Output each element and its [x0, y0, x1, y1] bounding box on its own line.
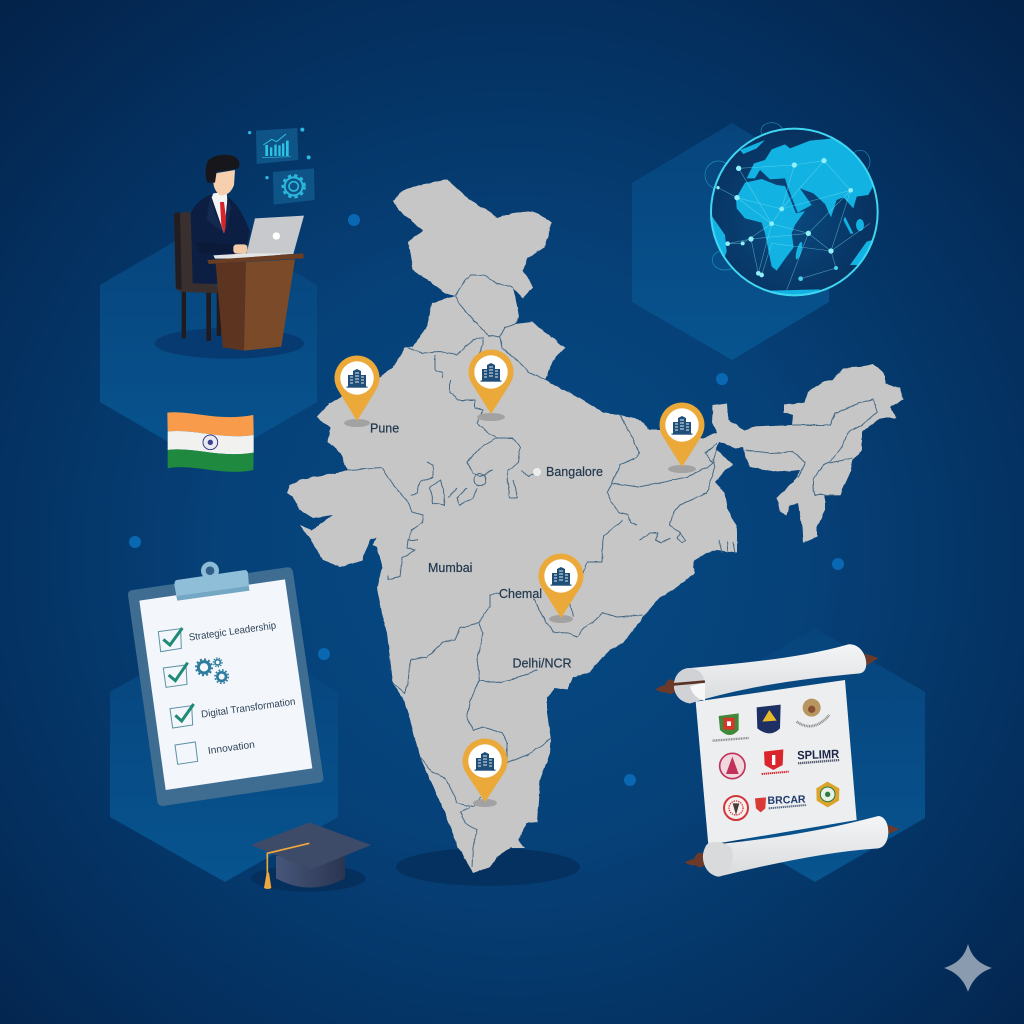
- state borders: [348, 275, 877, 867]
- hexagon: top left: [100, 222, 317, 465]
- hexagon: top right: [632, 123, 831, 360]
- indian flag: [167, 412, 254, 472]
- item 3 text: Digital Transformation: [201, 697, 296, 721]
- illustration: executive at desk: [155, 128, 315, 359]
- logo row 3: [724, 782, 839, 820]
- clip: [174, 562, 249, 601]
- item 2 gears icon: [196, 658, 228, 683]
- board: [128, 567, 323, 806]
- chair: [174, 212, 221, 341]
- pin 1: [334, 355, 380, 427]
- graduation cap: [251, 822, 371, 892]
- item 1 checkbox: [158, 628, 182, 652]
- scroll of institute logos: [655, 644, 899, 877]
- item 3 checkbox: [170, 704, 194, 728]
- logo row 2: SPLIMR: [797, 747, 840, 762]
- city label: Mumbai: Mumbai: [428, 561, 472, 575]
- map of India: [287, 179, 903, 873]
- item 1 text: Strategic Leadership: [188, 620, 277, 644]
- city label: Chennai: Chemal: [499, 587, 542, 601]
- top roll handles: [655, 653, 878, 694]
- continents: [712, 138, 873, 294]
- logo row 2: [720, 747, 840, 779]
- lectern desk: [207, 253, 304, 351]
- item 4 checkbox: [175, 742, 198, 764]
- pin 2: [468, 349, 514, 421]
- hexagon: bottom left: [110, 627, 338, 882]
- city label: Bangalore: Bangalore: [546, 465, 603, 479]
- sphere: [711, 129, 878, 295]
- decorative dot group: [129, 214, 844, 786]
- pin 3: [660, 402, 704, 473]
- rim: [711, 129, 878, 295]
- floating dots: [248, 128, 311, 179]
- paper: [139, 579, 312, 790]
- gear panel icon: [273, 168, 315, 205]
- hexagon: bottom right: [705, 628, 925, 882]
- orbit rings: [705, 123, 870, 270]
- map base shadow: [396, 848, 580, 886]
- network lines: [718, 161, 870, 290]
- top roll: [673, 644, 866, 703]
- chart panel icon: [256, 128, 298, 164]
- bottom roll handles: [685, 824, 899, 867]
- laptop: [213, 216, 304, 259]
- pin 4: [538, 553, 584, 623]
- bottom roll: [703, 816, 888, 877]
- item 2 checkbox: [163, 663, 188, 687]
- logo row 3: BRCAR: [767, 794, 806, 807]
- scroll sheet: [696, 680, 857, 845]
- logo row 1: [713, 699, 829, 741]
- pin 5: [462, 738, 508, 807]
- globe: [703, 123, 878, 300]
- clipboard checklist: [128, 562, 323, 806]
- person: [191, 155, 250, 284]
- country outline: [287, 179, 903, 873]
- floor shadow: [155, 328, 304, 359]
- sparkle mark: [944, 944, 992, 992]
- city label: Delhi/NCR: Delhi/NCR: [512, 656, 572, 670]
- city label: Pune: Pune: [370, 422, 399, 436]
- network nodes: [716, 158, 853, 281]
- item 4 text: Innovation: [207, 739, 256, 757]
